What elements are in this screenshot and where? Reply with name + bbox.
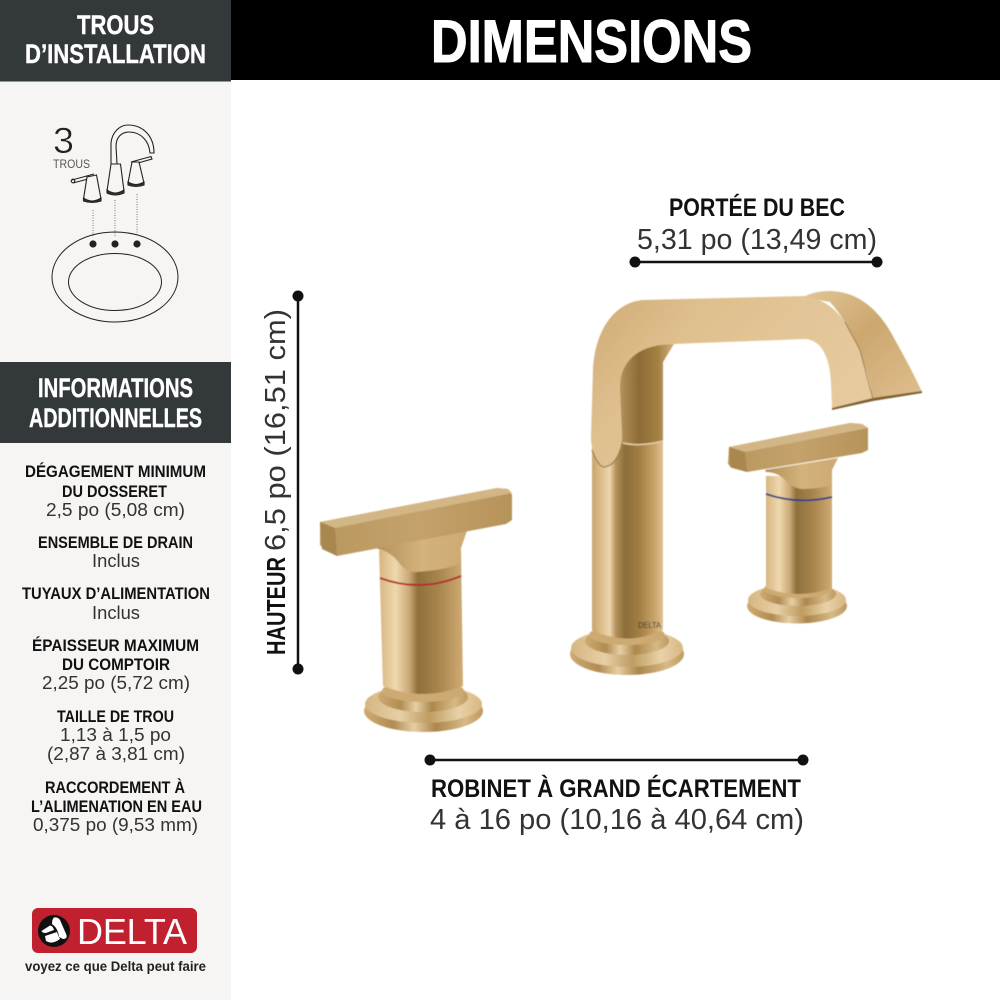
logo: delta: DELTA (77, 911, 187, 952)
spout tip (803, 291, 922, 399)
lever (320, 488, 512, 556)
spec list (22, 462, 210, 835)
spec: dégagement minimum: DÉGAGEMENT MINIMUM (25, 462, 206, 481)
spec: dégagement minimum (25, 462, 206, 520)
header: trous d'installation (0, 0, 231, 82)
heading text: TROUS (77, 10, 154, 40)
dimension: portée du bec: 5,31 po (13,49 cm) (637, 224, 877, 256)
spout front face (591, 296, 873, 467)
spout inner face (620, 344, 674, 445)
logo: delta (25, 908, 206, 974)
spec: tuyaux d'alimentation: Inclus (92, 603, 140, 623)
spec: ensemble de drain: ENSEMBLE DE DRAIN (38, 533, 193, 552)
spec: taille de trou: 1,13 à 1,5 po (60, 725, 171, 745)
base (570, 625, 684, 675)
icon: three-hole faucet and sink (52, 120, 178, 322)
arrow: spout reach (630, 256, 882, 268)
base (747, 580, 847, 624)
panel: informations additionnelles heading: ADDITIONNELLES (29, 403, 202, 433)
spec: raccordement: L’ALIMENATION EN EAU (31, 797, 202, 816)
heading text: D’INSTALLATION (25, 39, 206, 69)
dotted guide lines (93, 194, 137, 236)
faucet: left handle (320, 488, 512, 732)
dimension: robinet à grand écartement: 4 à 16 po (10,16 à 40,64 cm) (430, 804, 804, 836)
faucet: right handle (728, 423, 868, 624)
spec: dégagement minimum: DU DOSSERET (62, 482, 168, 501)
dimension: portée du bec: PORTÉE DU BEC (669, 193, 845, 222)
spec: taille de trou: (2,87 à 3,81 cm) (47, 744, 185, 764)
icon: delta emblem (38, 915, 70, 947)
column rim (623, 441, 663, 445)
spout lip shadow (592, 445, 622, 467)
spec: raccordement: RACCORDEMENT À (45, 778, 185, 797)
red indicator (380, 576, 461, 585)
spec: épaisseur maximum: DU COMPTOIR (62, 655, 170, 674)
panel: informations additionnelles heading (0, 362, 231, 443)
blue indicator (766, 494, 832, 500)
spec: tuyaux d'alimentation (22, 584, 210, 623)
label: 3 trous (53, 120, 90, 171)
dimension: hauteur: HAUTEUR (261, 557, 291, 655)
lever (728, 423, 868, 472)
spec: ensemble de drain (38, 533, 193, 571)
spec: taille de trou: TAILLE DE TROU (57, 707, 174, 726)
header: dimensions (231, 0, 1000, 80)
base (364, 680, 483, 732)
dimension: robinet à grand écartement (424, 754, 808, 836)
spec: ensemble de drain: Inclus (92, 551, 140, 571)
title: DIMENSIONS (431, 8, 752, 75)
brand mark: DELTA (638, 620, 661, 630)
label: 3 trous: TROUS (53, 157, 90, 171)
tagline: voyez ce que Delta peut faire (25, 958, 206, 974)
neck (375, 528, 468, 572)
spec: épaisseur maximum: 2,25 po (5,72 cm) (42, 673, 190, 693)
label: 3 trous: 3 (53, 120, 74, 161)
column (379, 550, 463, 694)
dimension: portée du bec (630, 193, 882, 268)
neck (765, 458, 838, 489)
dimension: hauteur: 6,5 po (16,51 cm) (260, 309, 292, 551)
spec: taille de trou (47, 707, 185, 764)
panel: informations additionnelles heading: INFORMATIONS (38, 373, 193, 403)
arrow: height (292, 290, 304, 674)
faucet: main spout (570, 291, 922, 675)
spec: raccordement: 0,375 po (9,53 mm) (33, 815, 198, 835)
spec: dégagement minimum: 2,5 po (5,08 cm) (46, 500, 185, 520)
icon: mini faucet (71, 125, 154, 202)
spec: raccordement (31, 778, 202, 835)
arrow: spread (424, 754, 808, 766)
column (592, 440, 663, 638)
icon: sink basin (52, 232, 178, 322)
dimension: robinet à grand écartement: ROBINET À GRAND ÉCARTEMENT (431, 774, 801, 803)
sidebar background (0, 80, 231, 1000)
dimension: hauteur (260, 290, 304, 674)
spec: tuyaux d'alimentation: TUYAUX D’ALIMENTATION (22, 584, 210, 603)
heading text (25, 10, 206, 69)
spec: épaisseur maximum: ÉPAISSEUR MAXIMUM (32, 636, 199, 655)
column (766, 476, 832, 594)
spec: épaisseur maximum (32, 636, 199, 693)
spout outlet edge (832, 391, 922, 410)
